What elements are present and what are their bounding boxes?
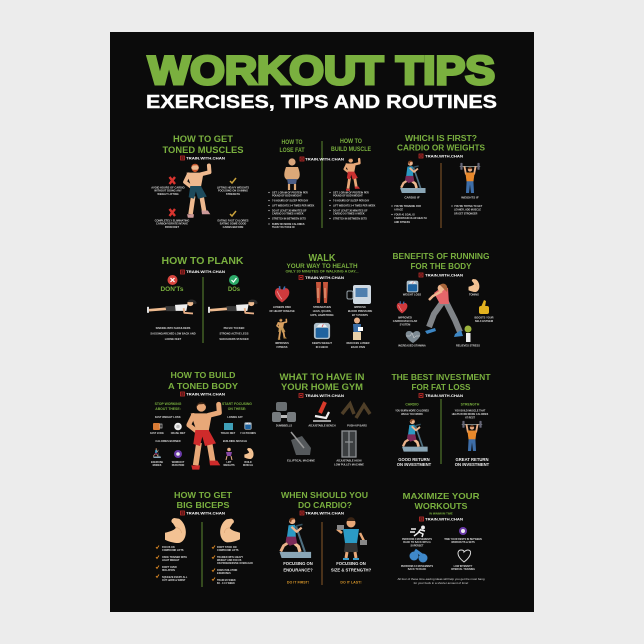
panel: walk: [269, 253, 372, 349]
heading: HOW TO GET: [174, 490, 233, 500]
tips weights: [451, 205, 483, 216]
tips right: LIFTING HEAVY WEIGHTS: [217, 186, 249, 190]
text: strength: SIZE & STRENGTH?: [331, 568, 372, 572]
label: cardio: CARDIO: [405, 402, 419, 406]
label: fast weight loss: FAST WEIGHT LOSS:: [155, 415, 181, 419]
tips lose fat: LIFT WEIGHTS 3-4 TIMES PER WEEK: [272, 204, 315, 208]
label: pulley machine: [334, 458, 364, 466]
icon: gold checks: [230, 178, 236, 216]
heading: ONLY 30 MINUTES OF WALKING A DAY...: [286, 270, 359, 274]
text: strength note: [452, 410, 489, 420]
tips build muscle: CARDIO 3-5 TIMES A WEEK: [333, 212, 365, 216]
text: heart: LOWERS RISK: [273, 305, 291, 309]
panel: benefits of running: [392, 252, 494, 348]
labels row one: FAST JUICE: [150, 432, 164, 435]
labels row two: MODES: [153, 464, 162, 467]
icon: blue dumbbell: [410, 550, 428, 562]
checklist left: SQUEEZE EVERY ALL: [162, 576, 188, 579]
text: dos: [219, 326, 249, 341]
checklist right: COMPOUND LIFTS: [217, 549, 239, 552]
icon: cardio runner: [153, 448, 161, 458]
heading: lose fat: [280, 140, 305, 154]
label: self esteem: SELF-ESTEEM: [475, 319, 493, 323]
text: donts: SAGGING/ARCHED LOW BACK AND: [150, 332, 196, 336]
column heading: stop: STOP WORKING: [155, 402, 182, 406]
tips cardio: YOUR #1 GOAL IS: [394, 214, 415, 216]
labels row one: [276, 424, 367, 428]
heading: DO CARDIO?: [298, 500, 352, 510]
label: cardio if: CARDIO IF: [404, 196, 420, 200]
text: cardio note: YOU BURN MORE CALORIES: [395, 410, 429, 412]
icon: heart: [275, 286, 289, 302]
text: cardio note: [395, 410, 429, 416]
heading: WALK: [308, 253, 336, 264]
text: good return: [397, 457, 432, 467]
text: intervals: INTERVAL TRAINING: [451, 568, 475, 571]
text: superset: SUPERSET: [411, 544, 424, 548]
title: WORKOUT TIPS: [148, 49, 495, 93]
figure: man with mug: [353, 318, 363, 340]
tips weights: YOU'RE TRYING TO GET: [454, 205, 483, 208]
heading: [392, 252, 490, 271]
heading: TONED MUSCLES: [162, 145, 244, 155]
label: donts: DON'Ts: [160, 287, 184, 293]
figure: fit man: [277, 319, 287, 340]
closing note: [397, 577, 485, 585]
text: strength: FOCUSING ON: [336, 561, 366, 566]
panel: maximize workouts: [397, 491, 485, 585]
text: good return: GOOD RETURN: [398, 457, 430, 462]
icon: blood pressure monitor: [347, 285, 371, 304]
text: blood pressure: IMPROVE: [354, 305, 366, 309]
panel: big biceps: [156, 490, 253, 587]
text: donts: [150, 326, 196, 341]
illustration: incorrect plank: [148, 299, 197, 314]
text: back to back: BACK TO BACK: [408, 568, 426, 571]
brand tag: TRAIN.WITH.CHAN: [305, 156, 344, 162]
labels row one: PUSH-UP BARS: [347, 424, 367, 428]
poster background: [110, 32, 534, 612]
labels row one: TRACK DIET: [221, 432, 236, 435]
icon: right arm: [220, 519, 240, 542]
text: blood pressure: [348, 305, 372, 317]
text: fitness: FITNESS: [277, 345, 288, 349]
heading: [168, 370, 238, 391]
labels row two: WEIGHTS: [223, 464, 235, 467]
closing note: for your buck in a shorter amount of time!: [414, 581, 469, 585]
heading: [280, 372, 364, 392]
icon: scale: [407, 281, 418, 292]
column heading: start: [222, 402, 252, 411]
label: cardiovascular: IMPROVED: [398, 316, 412, 320]
label: elliptical: ELLIPTICAL MACHINE: [287, 458, 315, 462]
labels row one: DUMBBELLS: [276, 424, 292, 428]
heading: YOUR WAY TO HEALTH: [286, 264, 358, 270]
tips left: FROM DIET: [165, 225, 180, 229]
label: self esteem: BOOSTS YOUR: [474, 316, 494, 320]
heading: FOR FAT LOSS: [412, 383, 471, 392]
heading: WORKOUTS: [414, 501, 468, 511]
column heading: stop: [155, 402, 182, 411]
checklist right: [212, 546, 253, 585]
panel: how to plank: [148, 256, 258, 343]
text: back to back: [401, 565, 433, 571]
subtitle: EXERCISES, TIPS AND ROUTINES: [146, 92, 497, 112]
label: calories: CALORIES BURNED: [155, 439, 181, 443]
text: blood pressure: BY 5 POINTS: [352, 313, 368, 317]
text: weight: IN CHECK: [316, 345, 328, 349]
brand tag: TRAIN.WITH.CHAN: [186, 156, 225, 160]
checklist left: FOCUS ON: [162, 546, 175, 549]
icon: scale: [244, 422, 252, 430]
text: legs: STRENGTHEN: [313, 305, 331, 309]
icon: heart outline: [458, 550, 471, 562]
callout: first: DO IT FIRST!: [287, 580, 309, 584]
label: self esteem: [474, 316, 494, 323]
label: dos: DOs: [228, 287, 241, 293]
illustration: treadmill runner: [280, 518, 311, 558]
heading: build muscle: BUILD MUSCLE: [331, 147, 371, 153]
checklist right: TRAIN 2X WEEK: [217, 579, 236, 582]
text: back pain: [346, 341, 370, 349]
text: heart: OF HEART DISEASE: [269, 309, 295, 313]
brand tag: TRAIN.WITH.CHAN: [425, 154, 463, 158]
checklist left: [156, 546, 188, 582]
text: rest: [444, 538, 482, 544]
heading: [162, 134, 244, 155]
heading: [397, 134, 486, 152]
text: great return: [455, 457, 490, 467]
text: superset: [402, 538, 432, 548]
figure: overweight man: [284, 158, 300, 190]
brand tag: TRAIN.WITH.CHAN: [425, 516, 463, 522]
icon: red cross: [170, 177, 175, 216]
heading: THE BEST INVESTMENT: [392, 373, 491, 382]
heading: WHICH IS FIRST?: [405, 134, 477, 143]
tips lose fat: DO AT LEAST 30 MINUTES OF: [272, 210, 307, 212]
icon: scale: [314, 323, 330, 339]
icon: running man: [410, 526, 425, 537]
text: legs: LEGS, QUADS,: [313, 309, 332, 313]
illustration: correct plank: [209, 299, 258, 314]
text: heart: [269, 305, 295, 313]
illustration: treadmill runner: [402, 419, 428, 452]
text: back pain: BACK PAIN: [351, 345, 365, 349]
text: strength note: AT REST: [465, 416, 476, 420]
tips right: FOCUSING ON GAINING: [218, 188, 248, 192]
icon: adjustable bench: [313, 402, 331, 421]
brand tag: TRAIN.WITH.CHAN: [186, 392, 225, 396]
tips weights: OR GET STRONGER: [454, 212, 478, 216]
illustration: man with dumbbells: [337, 517, 367, 560]
brand tag: TRAIN.WITH.CHAN: [425, 272, 463, 278]
checklist left: DON'T OVER: [162, 566, 177, 569]
text: endurance: FOCUSING ON: [283, 561, 313, 566]
heading: A TONED BODY: [168, 381, 238, 391]
brand tag: TRAIN.WITH.CHAN: [305, 393, 344, 398]
icon: plate: [174, 423, 182, 430]
icon: thumbs up: [479, 300, 489, 314]
icon: tracker: [224, 423, 233, 430]
checklist left: ISOLATION: [162, 569, 175, 572]
text: intervals: [451, 565, 475, 571]
heading: HOW TO BUILD: [170, 370, 236, 380]
tips right: [217, 186, 249, 229]
heading: BIG BICEPS: [176, 500, 230, 510]
heading: [174, 490, 233, 510]
text: legs: HIPS, HAMSTRING: [310, 313, 334, 317]
icon: push-up bars: [342, 404, 370, 418]
checklist left: ONCE TRAINED WITH: [162, 556, 187, 559]
tips lose fat: STRETCH IN BETWEEN SETS: [272, 218, 306, 220]
labels row two: DURATION: [172, 464, 184, 467]
icon: legs: [316, 282, 328, 303]
tips build muscle: 7-8 HOURS OF SLEEP PER DAY: [333, 200, 370, 202]
label: stress: RELIEVES STRESS: [456, 344, 480, 348]
text: cardio note: WHILE YOU WORK: [401, 413, 423, 416]
column heading: stop: ABOUT THESE:: [155, 407, 181, 411]
text: weight: [312, 341, 332, 349]
heading: build muscle: HOW TO: [340, 139, 362, 145]
heading: [286, 253, 359, 274]
text: superset: BACK TO BACK WITH A: [403, 541, 431, 544]
column heading: start: START FOCUSING: [222, 402, 252, 406]
text: legs: [310, 305, 334, 317]
figure: woman running: [425, 284, 463, 337]
tips left: AVOID HOURS OF CARDIO: [151, 186, 185, 190]
labels row two: MUSCLE: [243, 464, 253, 467]
text: rest: TIME YOUR RESTS IN BETWEEN: [444, 538, 482, 541]
closing note: All four of these time-saving ideas will help you get the most bang: [397, 577, 485, 581]
heading: MAXIMIZE YOUR: [402, 491, 480, 501]
text: strength note: YOU BUILD MUSCLE THAT: [455, 410, 486, 412]
tips build muscle: GET 1 GRAM OF PROTEIN PER: [333, 192, 369, 194]
icon: elliptical: [291, 432, 311, 455]
heading: WHAT TO HAVE IN: [280, 372, 364, 382]
icon: red cross: [168, 275, 178, 285]
heading: lose fat: HOW TO: [282, 140, 303, 146]
figure: bearded man: [185, 164, 210, 218]
tips build muscle: POUND OF BODYWEIGHT: [333, 194, 363, 198]
heading: YOUR HOME GYM: [281, 382, 363, 392]
label: pulley machine: LOW PULLEY MACHINE: [334, 462, 364, 466]
panel: how to get toned muscles: [151, 134, 249, 229]
checklist right: DON'T STICK ON: [217, 546, 237, 549]
icon: juice: [153, 423, 162, 430]
tips right: EATING SOME GOOD: [220, 222, 246, 226]
icon: flexed arm: [469, 279, 479, 292]
text: fitness: [275, 341, 289, 349]
text: dos: PELVIC TUCKED: [224, 326, 244, 330]
icon: woman lifting: [226, 448, 232, 460]
heading: [402, 491, 480, 516]
heading: CARDIO OR WEIGHTS: [397, 144, 486, 152]
heading: [281, 490, 368, 510]
labels row one: [150, 432, 256, 435]
label: toning: TONING: [469, 292, 479, 296]
tips left: COMPLETELY ELIMINATING: [155, 218, 189, 222]
tips lose fat: POUND OF BODYWEIGHT: [272, 194, 302, 198]
tips lose fat: GET 1 GRAM OF PROTEIN PER: [272, 192, 308, 194]
labels row one: 7-10 POUNDS: [240, 432, 256, 435]
icon: cable machine: [342, 431, 356, 457]
text: endurance: [283, 561, 313, 572]
checklist right: EXERCISES: [217, 572, 231, 575]
column heading: start: ON THESE:: [228, 407, 246, 411]
panel: best investment: [392, 373, 491, 467]
tips build muscle: LIFT WEIGHTS 3-4 TIMES PER WEEK: [333, 204, 376, 208]
text: great return: GREAT RETURN: [456, 457, 488, 462]
callout: last: DO IT LAST!: [340, 580, 362, 584]
tips lose fat: 7-8 HOURS OF SLEEP PER DAY: [272, 200, 309, 202]
text: back pain: REDUCES LOWER: [346, 341, 370, 345]
icon: dumbbells: [272, 402, 296, 422]
labels row two: EXERCISE: [151, 461, 163, 464]
panel: when to do cardio: [280, 490, 372, 585]
labels row two: WORKOUT: [172, 461, 185, 464]
tips cardio: [391, 205, 427, 224]
text: dos: SHOULDERS STACKED: [219, 337, 249, 341]
heading: FOR THE BODY: [410, 262, 472, 271]
brand tag: TRAIN.WITH.CHAN: [186, 510, 225, 516]
icon: timer: [459, 527, 467, 535]
text: blood pressure: BLOOD PRESSURE: [348, 309, 372, 313]
icon: left arm: [165, 518, 186, 543]
label: pulley machine: ADJUSTABLE HIGH/: [336, 458, 362, 462]
checklist right: WEIGHT AND FOCUS: [217, 559, 242, 562]
text: donts: LOOSE FEET: [165, 337, 182, 341]
icon: relaxed person: [464, 326, 472, 342]
tips cardio: CARDIOVASCULAR HEALTH: [394, 217, 427, 220]
text: endurance: ENDURANCE?: [283, 568, 313, 572]
heading: lose fat: LOSE FAT: [280, 148, 305, 154]
heading: [392, 373, 491, 392]
tips cardio: AND FITNESS: [394, 221, 410, 224]
figure: muscular man: [345, 158, 360, 191]
tips build muscle: DO AT LEAST 30 MINUTES OF: [333, 210, 368, 212]
checklist left: LIGHT WEIGHT: [162, 559, 180, 562]
panel: toned body: [150, 370, 256, 470]
label: cardiovascular: SYSTEM: [400, 322, 410, 326]
brand tag: TRAIN.WITH.CHAN: [305, 510, 344, 516]
panel: home gym: [272, 372, 370, 466]
checklist right: DOES ISOLATION: [217, 569, 238, 572]
icon: green check: [229, 275, 239, 285]
text: strength: [331, 561, 372, 572]
heading: build muscle: [331, 139, 371, 153]
panel: cardio or weights: [391, 134, 486, 228]
text: rest: WORKOUTS & SETS: [451, 541, 475, 544]
panel: lose fat vs build muscle: [268, 139, 376, 229]
labels row one: ADJUSTABLE BENCH: [308, 424, 336, 428]
heading: HOW TO GET: [173, 134, 234, 144]
text: weight: KEEPS WEIGHT: [312, 341, 332, 345]
brand tag: TRAIN.WITH.CHAN: [425, 393, 463, 398]
label: cardiovascular: CARDIOVASCULAR: [393, 319, 417, 323]
labels row one: CRASH DIET: [171, 432, 186, 435]
labels row two: LIFT: [226, 461, 232, 464]
tips right: EATING FAST CALORIES: [217, 218, 249, 222]
tips build muscle: STRETCH IN BETWEEN SETS: [333, 218, 367, 220]
tips lose fat: CARDIO 3-5 TIMES A WEEK: [272, 212, 304, 216]
checklist left: OUT HARD & WRIST: [162, 579, 186, 582]
tips left: WEIGHT LIFTING: [157, 192, 179, 196]
checklist right: TRAINED WITH HEAVY: [217, 556, 244, 559]
heading: WHEN SHOULD YOU: [281, 490, 368, 500]
label: stamina: INCREASED STAMINA: [398, 344, 426, 348]
tips lose fat: THAN YOU TAKE IN: [272, 226, 295, 229]
label: strength: STRENGTH: [461, 402, 480, 406]
label: weights if: WEIGHTS IF: [461, 196, 479, 200]
text: dos: STRONG ACTIVE LEGS: [219, 332, 249, 336]
labels row two: [151, 461, 253, 467]
icon: heart: [397, 301, 407, 313]
label: weight loss: WEIGHT LOSS: [403, 292, 421, 296]
brand tag: TRAIN.WITH.CHAN: [305, 275, 344, 280]
text: good return: ON INVESTMENT: [397, 462, 432, 467]
tips cardio: A RACE: [394, 208, 403, 212]
checklist right: ON PROGRESSIVE OVERLOAD: [217, 562, 253, 565]
text: fitness: IMPROVES: [275, 341, 289, 345]
heading: IN MINIMUM TIME: [429, 512, 453, 516]
tips right: CARBS BEFORE: [223, 225, 244, 229]
text: back to back: PERFORM 3-5 MOVEMENTS: [401, 565, 433, 568]
label: losing fat: LOSING FAT: [227, 415, 243, 419]
text: great return: ON INVESTMENT: [455, 462, 490, 467]
illustration: treadmill runner: [400, 161, 426, 193]
labels row two: BUILD: [244, 461, 252, 464]
tips weights: LEANER, ADD MUSCLE: [454, 208, 481, 212]
tips lose fat: [268, 192, 315, 229]
tips build muscle: [329, 192, 376, 220]
icon: timer: [174, 450, 182, 458]
heading: HOW TO PLANK: [162, 256, 244, 267]
checklist left: COMPOUND LIFTS: [162, 549, 184, 552]
text: superset: PERFORM 2 MOVEMENTS: [402, 538, 432, 541]
tips cardio: YOU'RE TRAINING FOR: [394, 205, 421, 208]
illustration: barbell lifter: [462, 421, 482, 451]
icon: grey heartbeat: [406, 331, 420, 343]
illustration: barbell lifter: [460, 163, 480, 193]
text: strength note: HELPS BURN MORE CALORIES: [452, 413, 489, 416]
tips left: WITHOUT DOING ANY: [154, 188, 182, 192]
text: intervals: LOW INTENSITY: [454, 565, 473, 568]
label: building muscle: BUILDING MUSCLE: [223, 439, 247, 443]
checklist right: 8X - 14 X WEEK: [217, 582, 235, 585]
tips left: [151, 186, 189, 229]
icon: flexed arm: [244, 448, 254, 459]
figure: muscular man: [189, 402, 220, 470]
brand tag: TRAIN.WITH.CHAN: [186, 269, 225, 274]
text: donts: SINKING INTO SHOULDERS: [156, 326, 191, 330]
tips lose fat: BURN 500 MORE CALORIES: [272, 223, 305, 226]
label: cardiovascular: [393, 316, 417, 326]
tips right: STRENGTH: [226, 192, 240, 196]
tips left: CARBOHYDRATE INTAKE: [156, 222, 188, 226]
heading: BENEFITS OF RUNNING: [392, 252, 490, 261]
